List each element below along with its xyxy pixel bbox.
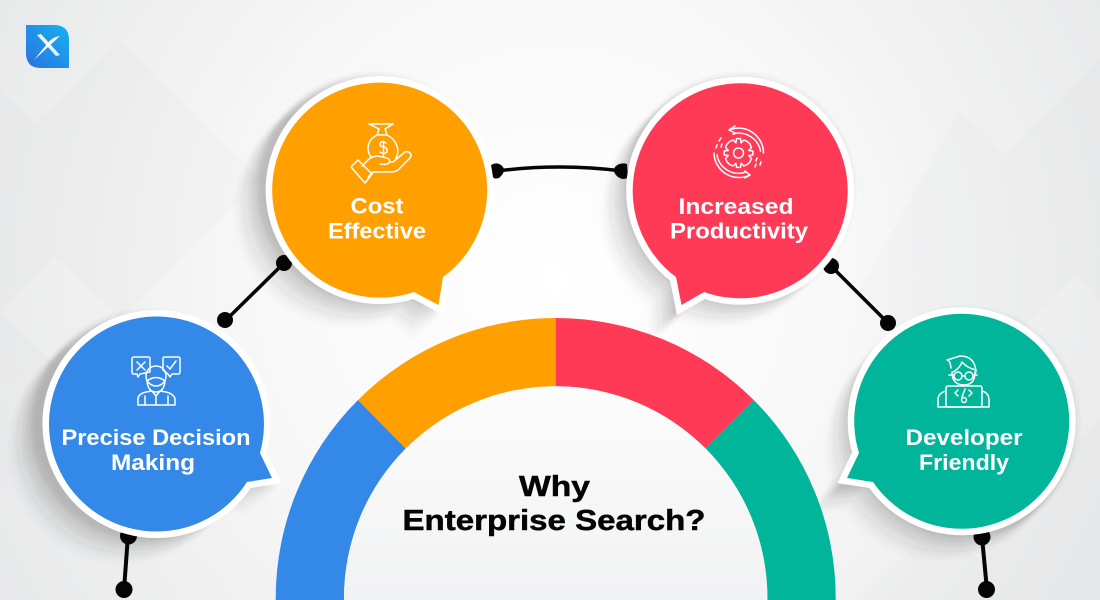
central disc: [344, 386, 767, 600]
shadows behind the callouts: [8, 73, 1079, 563]
title: Enterprise Search?: [402, 505, 706, 537]
ring segment: green: [705, 400, 836, 600]
callout: precise decision making: [49, 317, 272, 532]
icon: person with decision bubbles: [132, 357, 180, 405]
callout: developer friendly: [847, 314, 1069, 529]
title: [402, 471, 706, 537]
semicircular ring chart: [276, 318, 836, 600]
icon: money bag in hand: [351, 124, 411, 183]
label: [62, 425, 250, 475]
connector: precise decision making bottom: [116, 528, 137, 598]
label: [670, 194, 809, 244]
connector: increased productivity to developer friendly: [823, 258, 896, 331]
callout: increased productivity: [633, 83, 848, 305]
label: Productivity: [670, 218, 809, 244]
connector: precise decision making to cost effective: [217, 255, 292, 328]
label: Developer: [906, 425, 1023, 450]
label: [906, 425, 1023, 475]
bubble: [49, 317, 272, 532]
icon: gear with cycle arrows: [714, 126, 764, 178]
bubble: [633, 83, 848, 305]
callout: cost effective: [272, 83, 487, 305]
bubble: [272, 83, 487, 305]
label: Precise Decision: [62, 425, 250, 450]
ring segment: orange: [358, 318, 556, 448]
icon: developer with laptop: [938, 356, 989, 407]
label: Cost: [350, 194, 404, 218]
connector: developer friendly bottom: [974, 528, 995, 598]
label: Increased: [678, 194, 794, 219]
label: Friendly: [919, 450, 1010, 475]
bubble: [847, 314, 1069, 529]
logo: [26, 25, 69, 68]
title: Why: [519, 471, 590, 503]
ring segment: blue: [276, 400, 406, 600]
connector: cost effective to increased productivity: [491, 163, 628, 179]
ring segment: red: [556, 318, 754, 448]
label: [328, 194, 426, 244]
label: Effective: [328, 218, 426, 244]
label: Making: [111, 450, 195, 475]
